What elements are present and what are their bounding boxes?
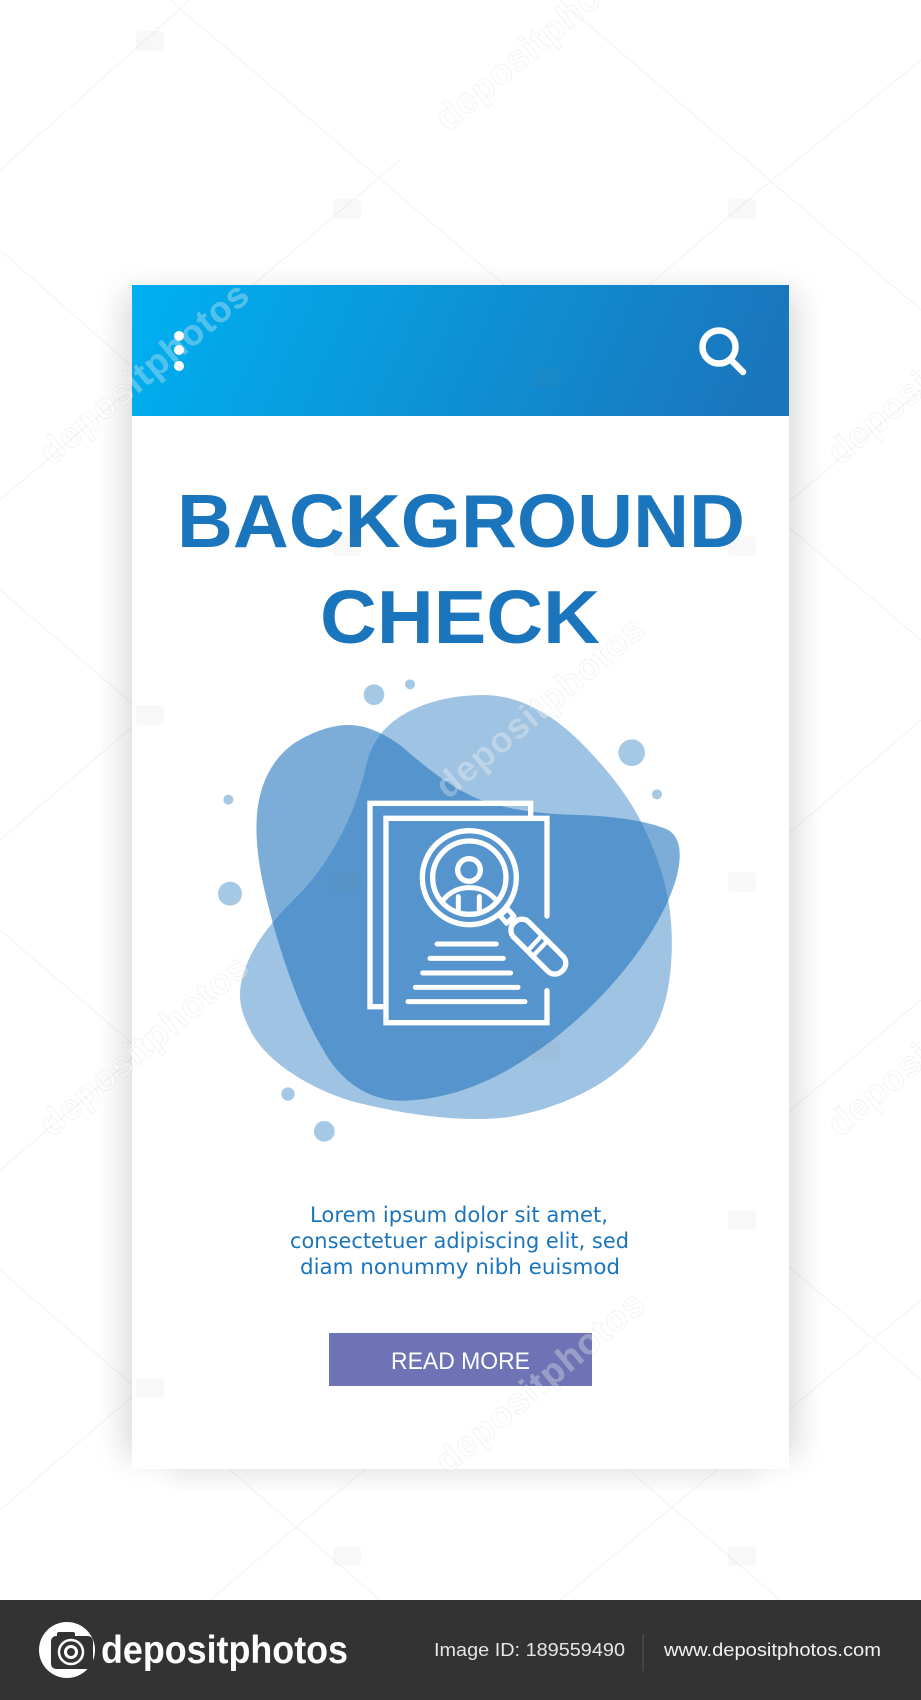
button: read more: READ MORE <box>391 1348 530 1375</box>
image id: Image ID: 189559490 <box>434 1640 625 1660</box>
blob: light back <box>240 695 672 1119</box>
body text: consectetuer adipiscing elit, sed <box>290 1229 629 1253</box>
logo icon: camera <box>39 1622 95 1678</box>
title: CHECK <box>320 575 600 659</box>
blob: darker front <box>256 725 680 1101</box>
watermarks: depositphotos <box>31 273 257 472</box>
card shadow <box>124 292 797 1478</box>
watermark camera marks <box>136 31 756 1566</box>
header bar <box>132 285 789 416</box>
icon: document with magnifier <box>370 803 570 1023</box>
logo wordmark: depositphotos <box>101 1629 348 1672</box>
title: BACKGROUND <box>177 479 745 563</box>
watermarks: depositphotos <box>31 945 257 1144</box>
text lines <box>408 944 525 1002</box>
body text <box>290 1203 629 1279</box>
icon: search <box>702 330 743 372</box>
title <box>177 479 745 659</box>
watermarks: depositphotos <box>427 607 653 806</box>
watermarks: depositphotos <box>427 1282 653 1481</box>
back page <box>370 803 531 1007</box>
front page <box>386 818 547 1023</box>
magnifier <box>422 831 516 925</box>
scattered dots <box>218 679 662 1142</box>
icon: menu dots <box>174 331 184 371</box>
body text: Lorem ipsum dolor sit amet, <box>310 1203 608 1227</box>
body text: diam nonummy nibh euismod <box>300 1255 620 1279</box>
illustration: blobs and document icon <box>218 679 680 1142</box>
button: read more <box>329 1333 592 1386</box>
footer bar <box>0 1600 921 1700</box>
website: www.depositphotos.com <box>663 1640 881 1660</box>
panel: phone card <box>132 285 789 1469</box>
